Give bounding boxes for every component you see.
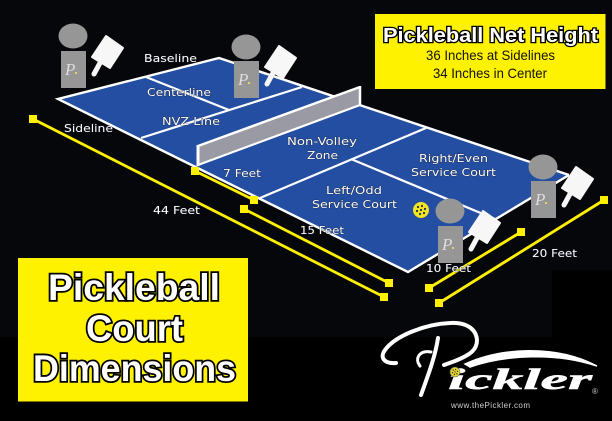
website: www.thePickler.com (450, 401, 530, 410)
dimension line: 15 feet (240, 205, 393, 287)
label: sideline: Sideline (64, 123, 113, 135)
label: baseline: Baseline (144, 53, 197, 65)
dimension line: 44 feet (29, 115, 388, 301)
logo: the Pickler (383, 323, 598, 410)
label: NVZ line: NVZ Line (162, 116, 220, 128)
label: 15 feet: 15 Feet (300, 225, 344, 237)
label: centerline: Centerline (147, 87, 211, 99)
logo ball (450, 367, 460, 377)
callout line 1: 36 Inches at Sidelines (426, 47, 555, 63)
registered mark: ® (592, 387, 598, 396)
title line 3: Dimensions (33, 348, 236, 389)
label: left/odd: Left/Odd (326, 185, 382, 197)
label: non-volley zone: Non-Volley (287, 136, 357, 148)
title line 1: Pickleball (48, 267, 220, 308)
logo: the Pickler: ickler (448, 363, 593, 396)
court surface (58, 58, 569, 272)
player: back left: P (64, 60, 75, 79)
player: front right (528, 154, 593, 218)
label: 44 feet: 44 Feet (153, 205, 200, 217)
label: 10 feet: 10 Feet (426, 263, 471, 275)
label: left service court: Service Court (312, 199, 397, 211)
net (198, 86, 360, 166)
label: right/even: Right/Even (419, 153, 488, 165)
court labels (64, 53, 577, 260)
player: front left: P (441, 235, 452, 254)
callout heading: Pickleball Net Height (383, 25, 598, 47)
dimension line: 7 feet (191, 167, 258, 204)
label: 7 feet: 7 Feet (223, 168, 261, 180)
player: front left (436, 198, 500, 263)
player: back right: P (237, 70, 248, 89)
title panel (18, 258, 248, 402)
callout line 2: 34 Inches in Center (433, 65, 547, 81)
player: back left (58, 24, 123, 88)
net height callout (375, 14, 606, 89)
label: zone: Zone (307, 150, 338, 162)
player: back right (232, 34, 296, 98)
label: right service court: Service Court (411, 167, 496, 179)
dimension line: 20 feet (435, 196, 608, 307)
dimension line: 10 feet (425, 228, 525, 292)
player: front right: P (534, 190, 545, 209)
title line 2: Court (86, 308, 183, 349)
label: 20 feet: 20 Feet (532, 248, 577, 260)
icon: pickleball (413, 202, 429, 218)
